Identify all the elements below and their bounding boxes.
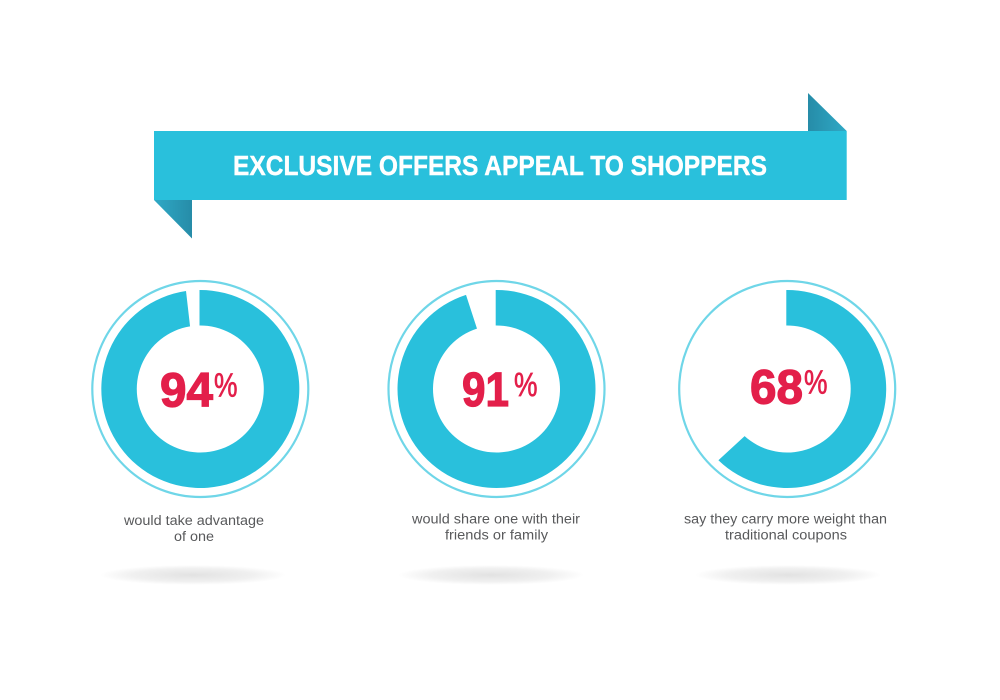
value: 94%: % bbox=[214, 366, 238, 404]
caption bbox=[684, 512, 887, 544]
ground shadow bbox=[398, 565, 584, 585]
donut chart: 94% bbox=[101, 290, 299, 488]
value: 91%: % bbox=[514, 366, 538, 403]
value: 68%: % bbox=[804, 364, 828, 400]
donut chart: 68% bbox=[718, 290, 886, 488]
caption bbox=[411, 512, 580, 544]
banner right fold bbox=[808, 93, 847, 131]
banner left fold bbox=[154, 200, 192, 238]
banner ribbon bbox=[154, 131, 847, 200]
caption: friends or family bbox=[445, 528, 549, 544]
caption: of one bbox=[174, 529, 214, 545]
donut chart: 91% bbox=[398, 290, 596, 488]
value: 68%: 68 bbox=[750, 362, 803, 414]
caption: would share one with their bbox=[411, 512, 580, 528]
value: 91%: 91 bbox=[462, 364, 509, 417]
value: 68% bbox=[750, 362, 828, 414]
ground shadow bbox=[695, 565, 881, 585]
outer ring bbox=[388, 281, 604, 497]
caption: would take advantage bbox=[123, 513, 264, 529]
caption: traditional coupons bbox=[725, 528, 847, 544]
caption: say they carry more weight than bbox=[684, 512, 887, 528]
banner bbox=[154, 93, 847, 238]
outer ring bbox=[92, 281, 308, 497]
caption bbox=[123, 513, 264, 545]
title: EXCLUSIVE OFFERS APPEAL TO SHOPPERS bbox=[233, 150, 767, 181]
panel: 91 percent bbox=[388, 281, 604, 585]
value: 94%: 94 bbox=[160, 364, 213, 418]
outer ring bbox=[679, 281, 895, 497]
value: 94% bbox=[160, 364, 238, 418]
ground shadow bbox=[100, 565, 286, 585]
panel: 94 percent bbox=[92, 281, 308, 585]
panel: 68 percent bbox=[679, 281, 895, 585]
